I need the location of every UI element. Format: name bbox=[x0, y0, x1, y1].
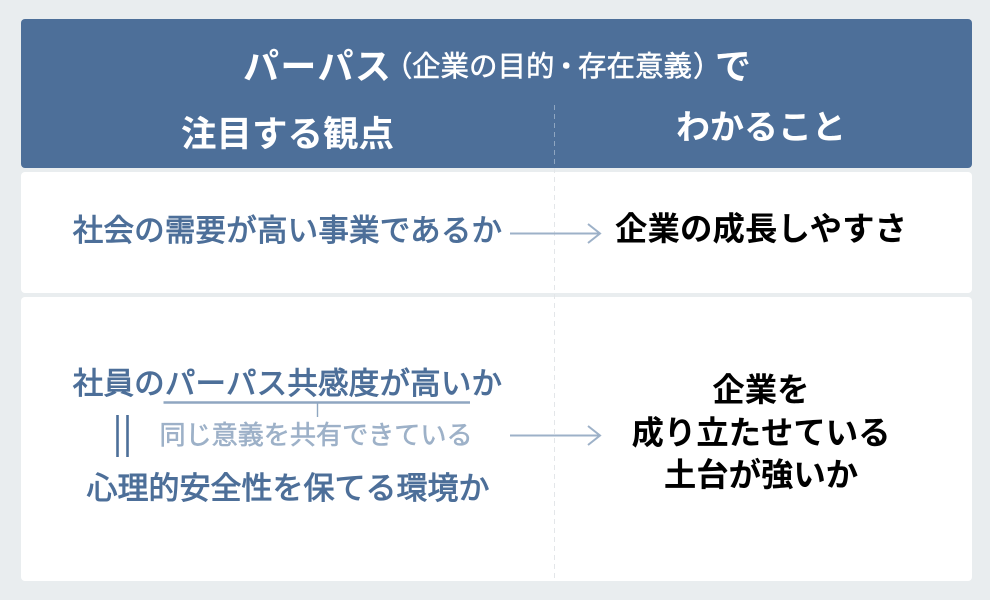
equals sign bbox=[116, 415, 129, 457]
panel: row 1 bbox=[21, 172, 972, 293]
heading: title: 企業の目的 bbox=[412, 51, 555, 83]
heading: title: で bbox=[715, 46, 751, 87]
underline bracket bbox=[164, 401, 470, 417]
heading: title: （ bbox=[384, 51, 413, 83]
heading: title: ） bbox=[693, 51, 722, 83]
heading: title: 存在意義 bbox=[578, 51, 692, 83]
text: foundation outcome: 成り立たせている bbox=[631, 414, 891, 450]
panel: row 2 bbox=[21, 297, 972, 581]
text: shared meaning note: 同じ意義を共有できている bbox=[159, 420, 473, 450]
text: foundation outcome: 企業を bbox=[712, 372, 810, 408]
text: empathy question: 社員のパーパス共感度が高いか bbox=[73, 367, 502, 401]
heading: right column: わかること bbox=[676, 109, 846, 147]
heading: left column: 注目する観点 bbox=[181, 114, 394, 154]
text: psychological safety question: 心理的安全性を保てる環境か bbox=[86, 471, 490, 506]
text: growth outcome: 企業の成長しやすさ bbox=[615, 211, 907, 247]
panel: header bbox=[21, 19, 972, 168]
text: foundation outcome: 土台が強いか bbox=[664, 457, 858, 493]
text: foundation outcome bbox=[631, 372, 891, 493]
arrow: row 2 bbox=[510, 425, 602, 446]
arrow: row 1 bbox=[510, 223, 602, 244]
heading: title: ・ bbox=[552, 51, 581, 83]
heading: title: パーパス bbox=[243, 46, 392, 87]
heading: title bbox=[243, 46, 751, 87]
text: social demand question: 社会の需要が高い事業であるか bbox=[73, 214, 502, 248]
